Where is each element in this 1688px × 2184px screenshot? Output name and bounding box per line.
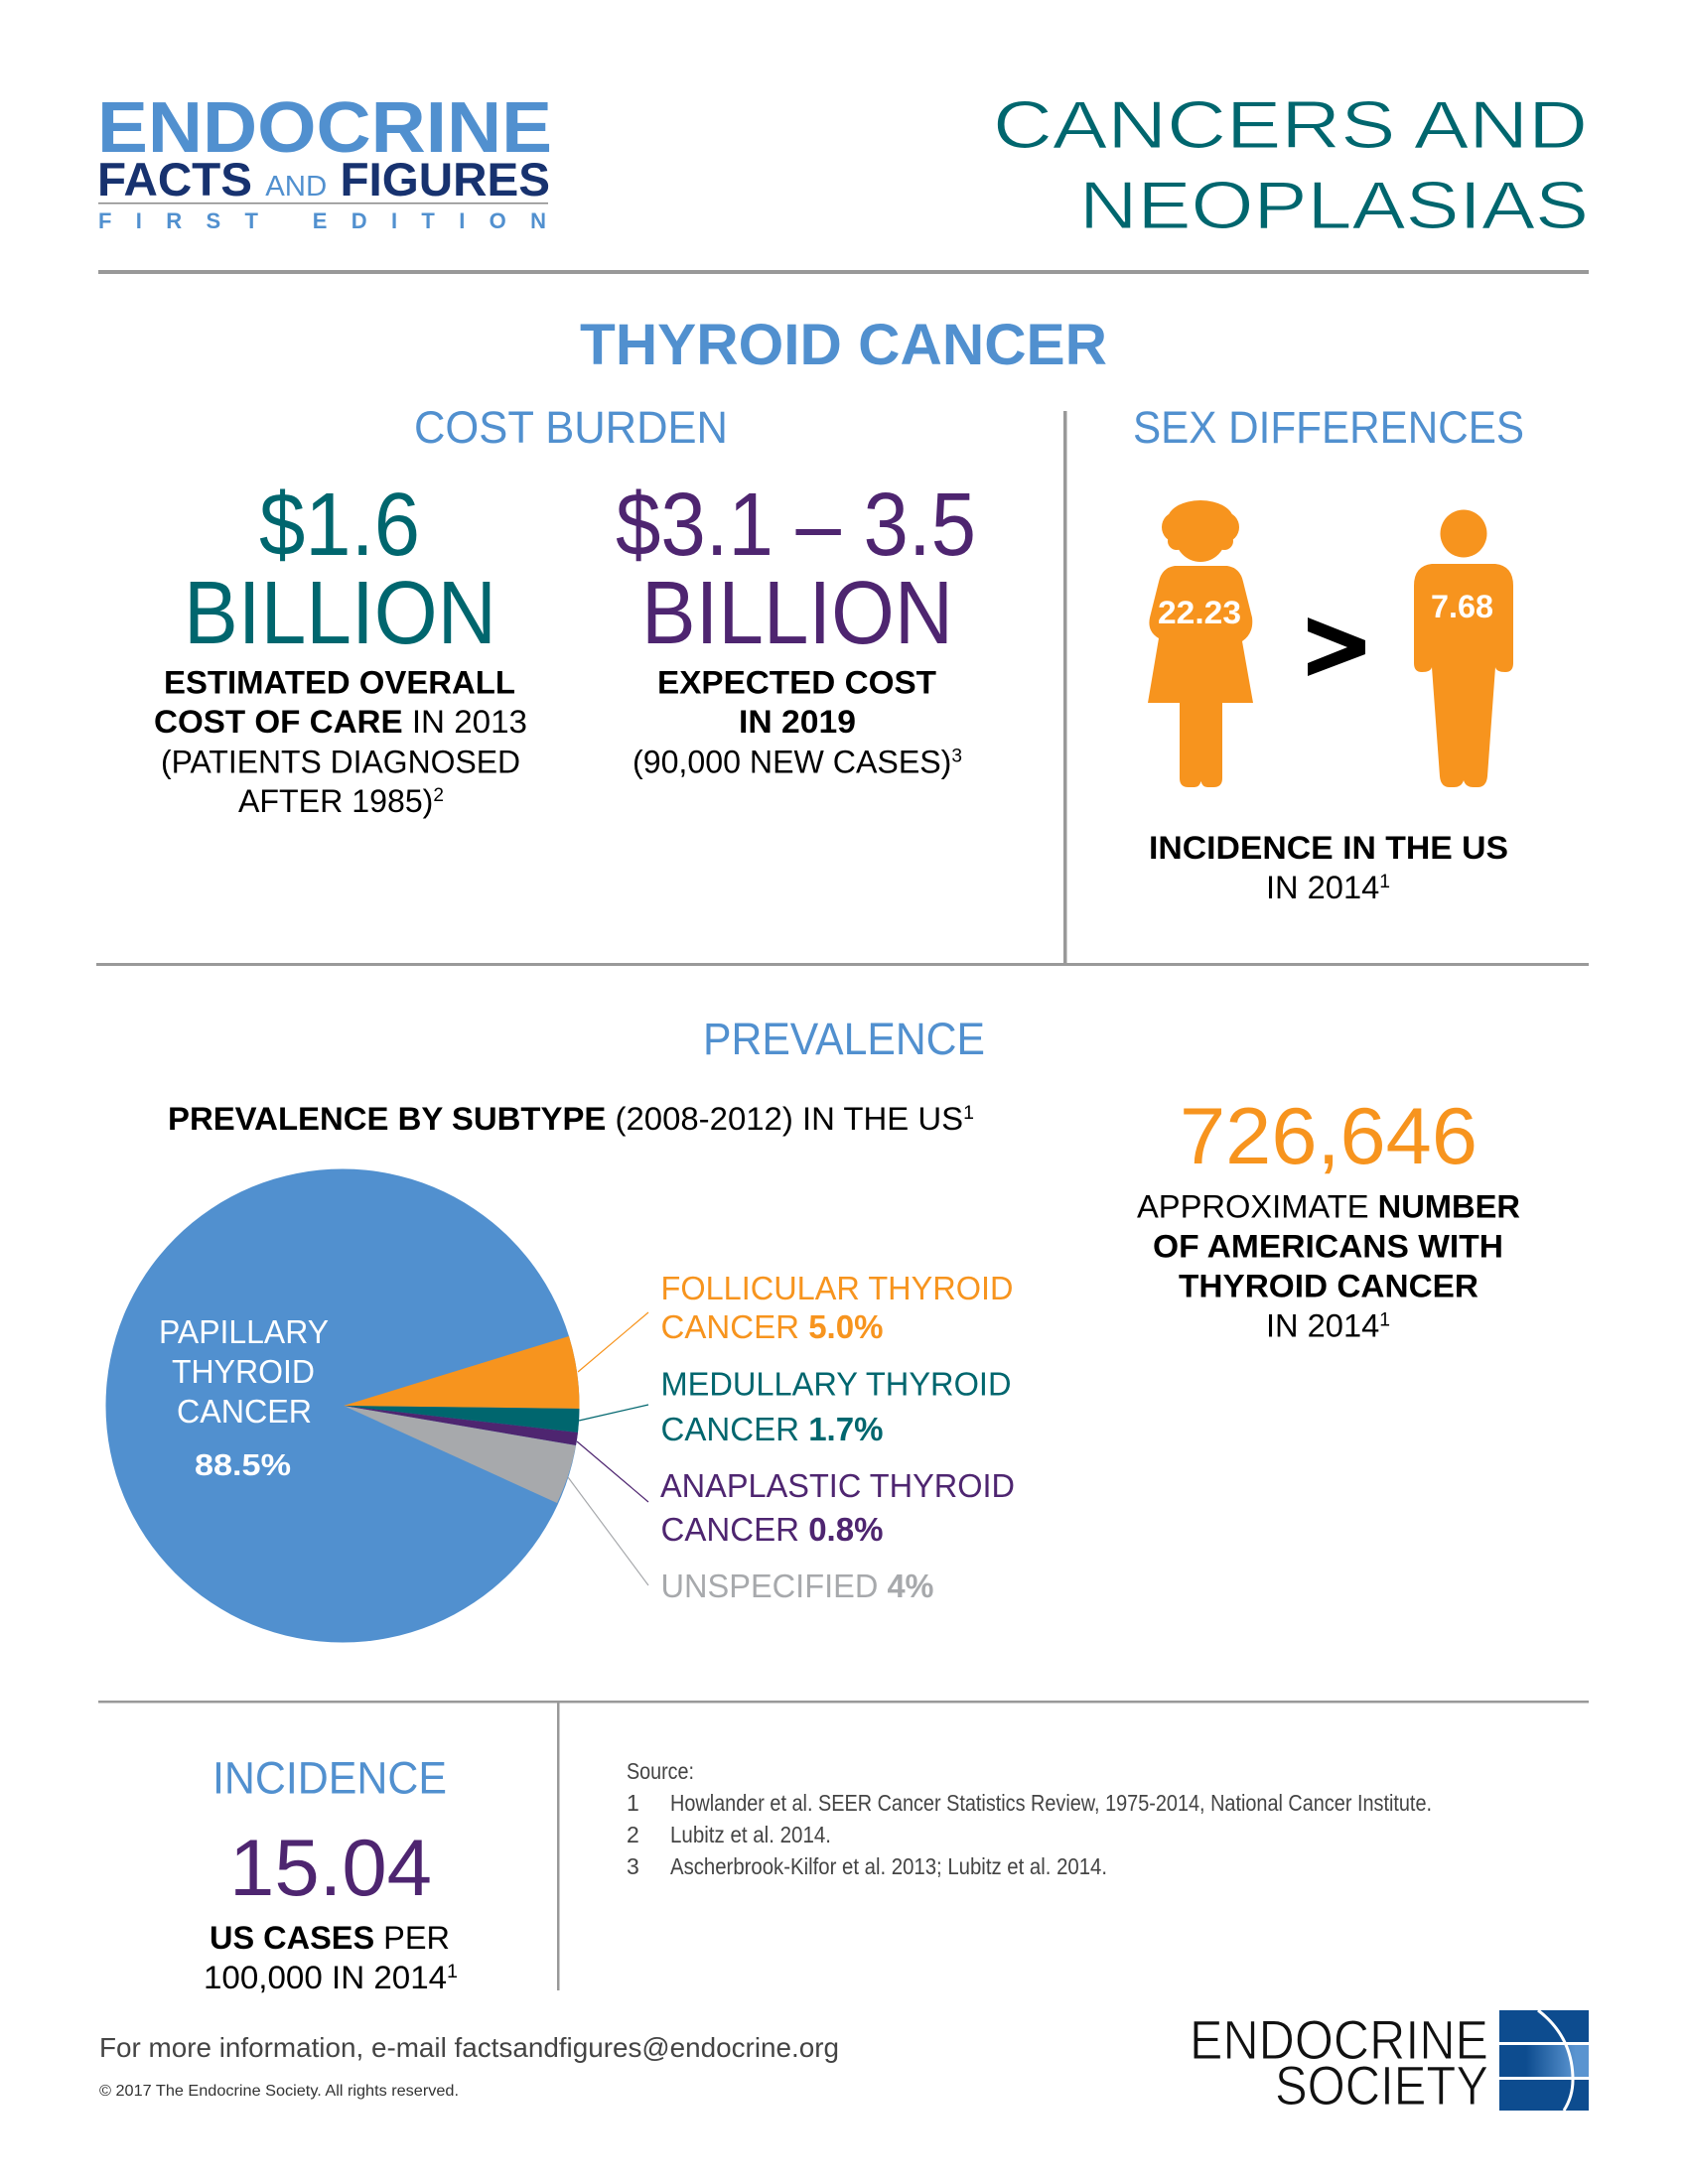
panel: prevalence [105, 1014, 1520, 1642]
text: incidence in the US: INCIDENCE IN THE US [1149, 830, 1508, 866]
text: expected cost: IN 2019 [739, 704, 856, 740]
label: medullary: MEDULLARY THYROID [661, 1366, 1011, 1402]
text: estimated overall cost [154, 665, 527, 819]
sources: Source: [627, 1758, 694, 1784]
icon: man: 7.68 [1431, 589, 1493, 624]
panel: incidence [204, 1753, 458, 1995]
text: approximate number: THYROID CANCER [1179, 1269, 1478, 1304]
stat: $1.6 billion: BILLION [184, 564, 496, 663]
logo: Endocrine Facts and Figures: FIRST EDITION [98, 208, 546, 233]
pie chart: prevalence by subtype: PAPILLARY [159, 1313, 329, 1350]
text: estimated overall cost: COST OF CARE IN 2013 [154, 704, 527, 740]
text: estimated overall cost: 2 [433, 785, 444, 806]
label: anaplastic: CANCER 0.8% [661, 1511, 884, 1548]
stat: $1.6 billion: $1.6 [259, 476, 420, 575]
title: Cancers and Neoplasias [993, 87, 1589, 243]
icon: woman [1148, 500, 1253, 787]
label: unspecified: UNSPECIFIED 4% [661, 1568, 933, 1604]
text: US cases: 1 [447, 1962, 458, 1982]
label: follicular: CANCER 5.0% [661, 1308, 884, 1345]
logo: Endocrine Facts and Figures: FACTS AND FIGURES [97, 153, 550, 205]
icon: woman: 22.23 [1158, 595, 1241, 630]
text: expected cost [633, 665, 962, 780]
logo: Endocrine Society [1190, 2008, 1589, 2116]
icon: greater than [1308, 617, 1365, 676]
sources: 3 [627, 1853, 639, 1879]
text: expected cost: EXPECTED COST [657, 665, 936, 701]
label: follicular [661, 1270, 1013, 1345]
heading: incidence: INCIDENCE [212, 1753, 447, 1803]
sources: Ascherbrook-Kilfor et al. 2013; Lubitz et al. 2014. [670, 1853, 1107, 1879]
stat: $1.6 billion [184, 476, 496, 663]
label: follicular: FOLLICULAR THYROID [661, 1270, 1013, 1306]
chart title: PREVALENCE BY SUBTYPE (2008-2012) IN THE US [168, 1101, 953, 1137]
panel: sex differences [1133, 402, 1524, 905]
label: anaplastic: ANAPLASTIC THYROID [660, 1467, 1015, 1504]
sources: 1 [627, 1790, 639, 1816]
label: medullary: CANCER 1.7% [661, 1411, 884, 1447]
text: incidence in the US [1149, 830, 1508, 905]
text: estimated overall cost: AFTER 1985) [238, 783, 433, 819]
pie chart: prevalence by subtype: 88.5% [195, 1447, 291, 1482]
text: expected cost: 3 [951, 747, 962, 766]
text: expected cost: (90,000 NEW CASES) [633, 745, 950, 780]
stat: $3.1-3.5 billion: BILLION [641, 564, 953, 663]
pie chart: prevalence by subtype: CANCER [177, 1393, 312, 1430]
stat: $3.1-3.5 billion: $3.1 – 3.5 [616, 476, 976, 575]
text: estimated overall cost: ESTIMATED OVERALL [164, 665, 515, 701]
heading: Thyroid Cancer: THYROID CANCER [580, 313, 1107, 377]
text: incidence in the US: IN 2014 [1266, 870, 1377, 905]
label: medullary [661, 1366, 1011, 1447]
text: approximate number: APPROXIMATE NUMBER [1137, 1189, 1520, 1225]
stat: 726,646: 726,646 [1180, 1092, 1477, 1181]
heading: prevalence: PREVALENCE [703, 1014, 985, 1064]
sources [627, 1758, 1432, 1879]
text: approximate number: IN 2014 [1266, 1308, 1377, 1344]
text: approximate number [1137, 1189, 1520, 1344]
label: anaplastic [660, 1467, 1015, 1548]
title: Cancers and Neoplasias: CANCERS AND [993, 87, 1588, 163]
heading: cost burden: COST BURDEN [414, 402, 728, 453]
icon: man [1414, 510, 1513, 787]
stat: 15.04: 15.04 [229, 1824, 432, 1913]
panel: cost burden [154, 402, 976, 819]
text: estimated overall cost: (PATIENTS DIAGNOSED [161, 745, 520, 780]
pie chart: prevalence by subtype: THYROID [172, 1353, 315, 1390]
text: approximate number: OF AMERICANS WITH [1153, 1229, 1503, 1265]
logo: Endocrine Facts and Figures [97, 88, 552, 233]
copyright: © 2017 The Endocrine Society. All rights reserved. [99, 2083, 459, 2100]
sources: 2 [627, 1822, 639, 1847]
text: US cases: 100,000 IN 2014 [204, 1960, 439, 1995]
text: US cases [204, 1920, 458, 1995]
text: approximate number: 1 [1379, 1310, 1390, 1330]
text: US cases: US CASES PER [210, 1920, 450, 1956]
logo: Endocrine Society: ENDOCRINE [1190, 2008, 1488, 2071]
pie chart: prevalence by subtype [105, 1169, 580, 1642]
text: incidence in the US: 1 [1379, 872, 1390, 892]
footer contact: For more information, e-mail factsandfigures@endocrine.org [99, 2032, 839, 2063]
title: Cancers and Neoplasias: NEOPLASIAS [1079, 168, 1589, 243]
logo: Endocrine Society: SOCIETY [1275, 2054, 1488, 2116]
sources: Lubitz et al. 2014. [670, 1822, 831, 1847]
chart title: 1 [963, 1103, 974, 1124]
logo: Endocrine Facts and Figures: ENDOCRINE [97, 88, 552, 168]
heading: sex differences: SEX DIFFERENCES [1133, 402, 1524, 453]
stat: $3.1-3.5 billion [616, 476, 976, 663]
sources: Howlander et al. SEER Cancer Statistics Review, 1975-2014, National Cancer Institute. [670, 1790, 1432, 1816]
leader lines [568, 1312, 648, 1585]
